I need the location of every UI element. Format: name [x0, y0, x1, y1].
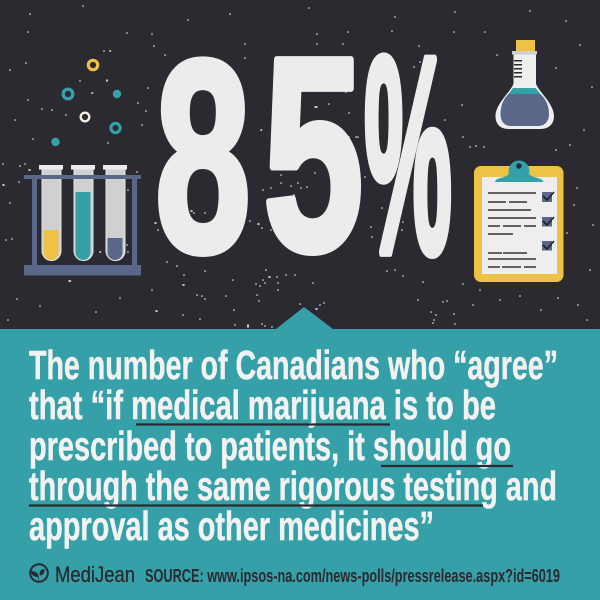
icon: test tubes in rack — [24, 165, 141, 276]
digit 8: 8 — [155, 5, 251, 309]
percent sign: % — [364, 0, 452, 312]
clipboard clip — [495, 161, 544, 182]
logo mark — [30, 564, 48, 582]
tube teal — [71, 165, 95, 260]
rack — [24, 175, 141, 276]
headline statement — [29, 342, 558, 549]
big number 85% — [155, 0, 452, 312]
logo: MediJean — [30, 562, 135, 587]
headline statement: approval as other medicines” — [29, 503, 434, 549]
digit 5: 5 — [263, 1, 364, 309]
teal panel — [0, 329, 600, 600]
icon: flask — [496, 40, 554, 129]
pointer triangle — [276, 307, 333, 329]
emphasis underlines — [29, 424, 513, 506]
tube blue — [103, 165, 127, 260]
tube yellow — [39, 165, 63, 260]
checkboxes — [542, 192, 554, 250]
icon: clipboard — [474, 161, 564, 282]
icon: floating bubbles — [51, 60, 121, 146]
checklist lines — [488, 193, 536, 267]
logo wordmark: MediJean — [55, 562, 135, 587]
